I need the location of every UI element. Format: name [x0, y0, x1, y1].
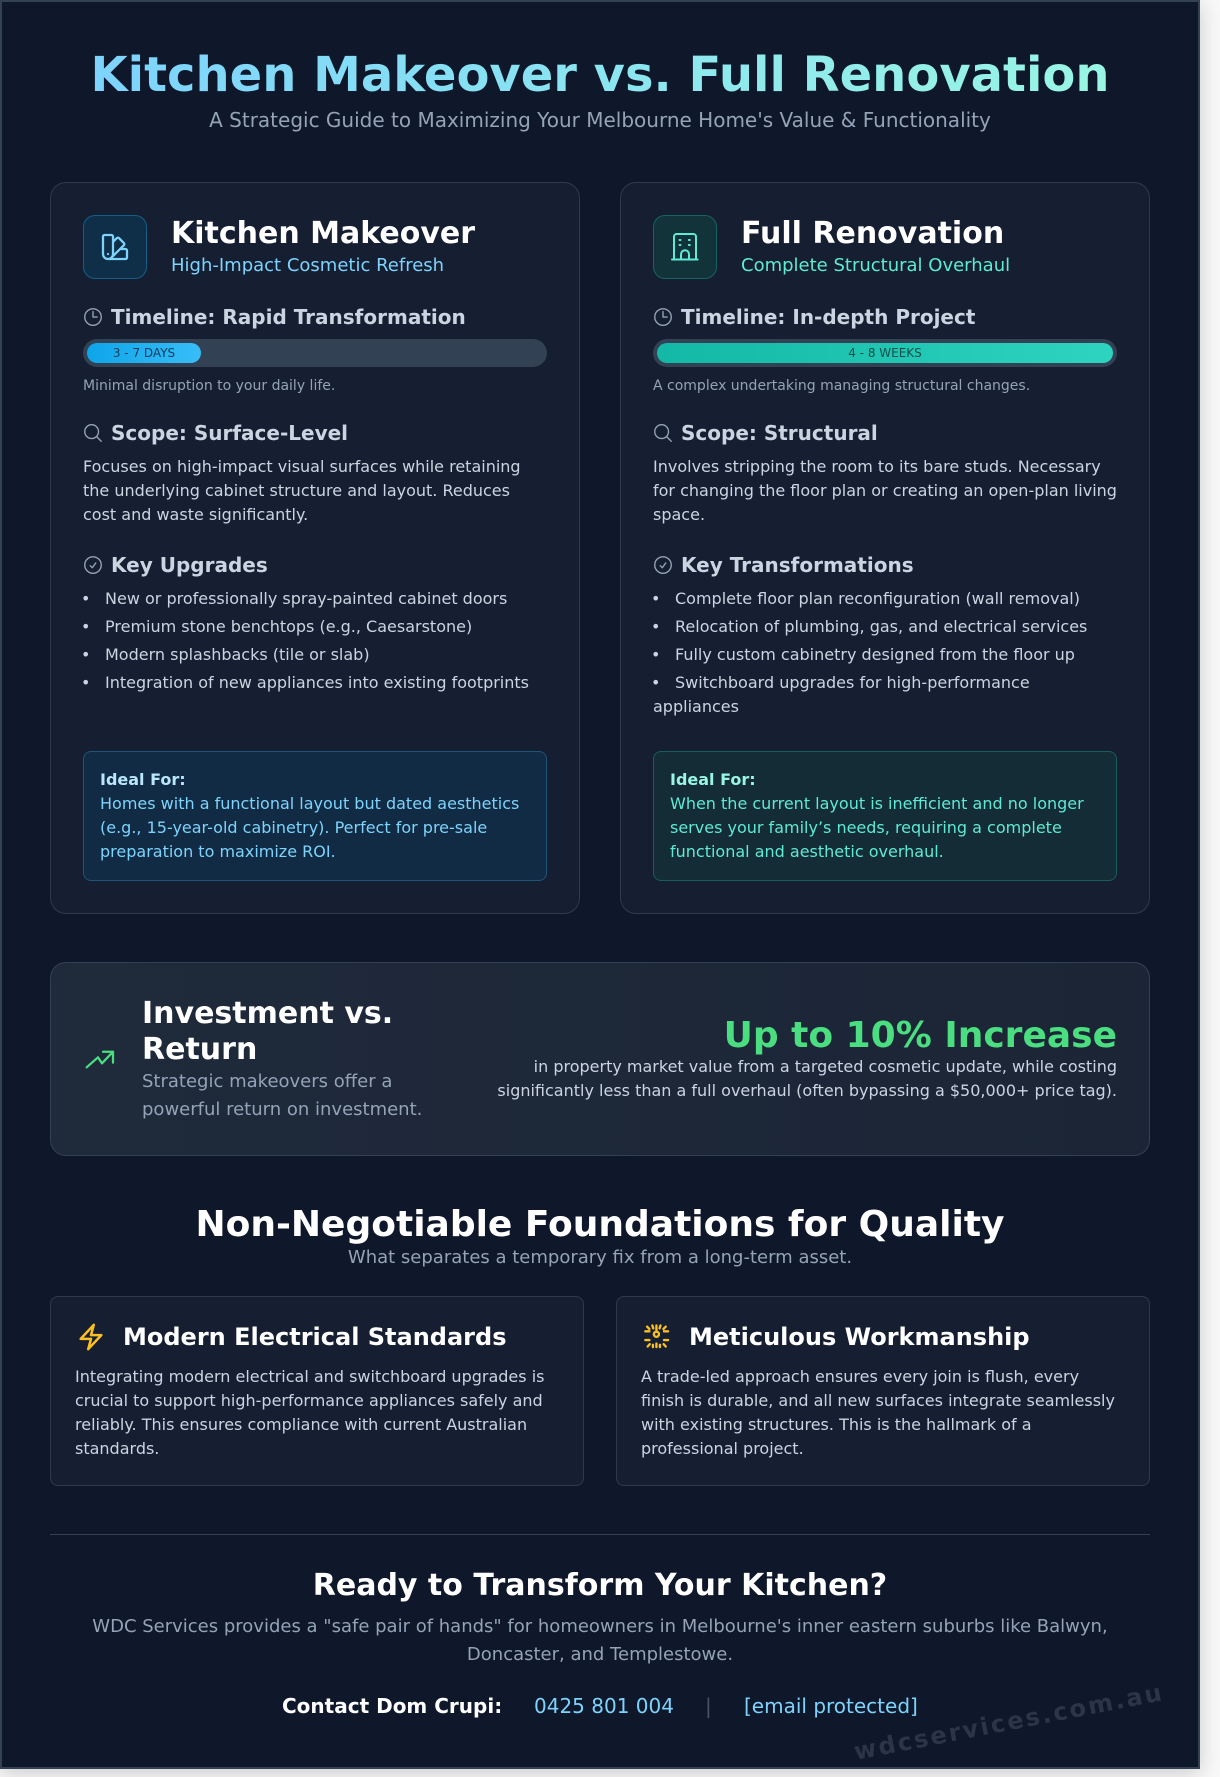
panel: full renovation	[620, 182, 1150, 914]
icon: search	[84, 424, 102, 442]
callout label: Ideal For:	[670, 770, 756, 789]
cta heading: Ready to Transform Your Kitchen?	[313, 1568, 887, 1603]
stat description	[497, 1057, 1117, 1100]
panel: meticulous workmanship	[616, 1296, 1150, 1486]
card text: crucial to support high-performance appliances safely and	[75, 1391, 543, 1410]
card text: professional project.	[641, 1439, 804, 1458]
card text: standards.	[75, 1439, 159, 1458]
scope text	[83, 457, 521, 524]
panel: investment vs return	[50, 962, 1150, 1156]
scope text: space.	[653, 505, 705, 524]
bar fill: 4 - 8 weeks	[657, 343, 1113, 363]
scope text	[653, 457, 1117, 524]
transformations list: •	[651, 645, 660, 664]
callout text: (e.g., 15-year-old cabinetry). Perfect for pre-sale	[100, 818, 487, 837]
icon: building	[653, 215, 717, 279]
bar fill: 3 - 7 days	[87, 343, 201, 363]
title: Kitchen Makeover vs. Full Renovation	[90, 47, 1110, 103]
card text	[641, 1367, 1115, 1458]
card text: finish is durable, and all new surfaces integrate seamlessly	[641, 1391, 1115, 1410]
icon: workmanship spark	[644, 1324, 670, 1348]
callout text: When the current layout is inefficient and no longer	[670, 794, 1084, 813]
callout text: Homes with a functional layout but dated aesthetics	[100, 794, 519, 813]
timeline heading: Timeline: Rapid Transformation	[111, 305, 466, 329]
cta text	[92, 1616, 1108, 1665]
panel: kitchen makeover	[50, 182, 580, 914]
timeline caption: A complex undertaking managing structural changes.	[653, 378, 1030, 394]
contact label: Contact Dom Crupi:	[282, 1694, 502, 1718]
stat description: significantly less than a full overhaul (often bypassing a $50,000+ price tag).	[497, 1081, 1117, 1100]
timeline caption: Minimal disruption to your daily life.	[83, 378, 335, 394]
callout text	[670, 794, 1084, 861]
timeline bar	[653, 339, 1117, 367]
subtitle: A Strategic Guide to Maximizing Your Melbourne Home's Value & Functionality	[209, 108, 991, 132]
card heading: Meticulous Workmanship	[689, 1323, 1030, 1351]
scope text: cost and waste significantly.	[83, 505, 308, 524]
upgrades list: Modern splashbacks (tile or slab)	[105, 645, 370, 664]
icon: trending up	[86, 1050, 114, 1068]
bar fill: 3 - 7 days: 3 - 7 DAYS	[113, 346, 175, 360]
scope text: the underlying cabinet structure and layout. Reduces	[83, 481, 510, 500]
section subheading: What separates a temporary fix from a long-term asset.	[348, 1247, 852, 1268]
card heading: Modern Electrical Standards	[123, 1323, 506, 1351]
callout text: functional and aesthetic overhaul.	[670, 842, 944, 861]
upgrades list: •	[81, 673, 90, 692]
scope heading: Scope: Surface-Level	[111, 421, 348, 445]
transformations list: Switchboard upgrades for high-performance	[675, 673, 1030, 692]
icon: swatch book	[83, 215, 147, 279]
upgrades list	[81, 589, 529, 692]
transformations list: Fully custom cabinetry designed from the floor up	[675, 645, 1075, 664]
transformations list	[651, 589, 1087, 716]
investment subtext: Strategic makeovers offer a	[142, 1071, 392, 1092]
phone: 0425 801 004	[534, 1694, 674, 1718]
timeline heading: Timeline: In-depth Project	[681, 305, 975, 329]
card text: A trade-led approach ensures every join is flush, every	[641, 1367, 1079, 1386]
transformations list: •	[651, 673, 660, 692]
transformations list: •	[651, 589, 660, 608]
transformations heading: Key Transformations	[681, 553, 914, 577]
card text: with existing structures. This is the hallmark of a	[641, 1415, 1032, 1434]
transformations list: Complete floor plan reconfiguration (wall removal)	[675, 589, 1080, 608]
icon: clock	[654, 308, 672, 326]
upgrades list: New or professionally spray-painted cabinet doors	[105, 589, 507, 608]
icon: check circle	[84, 556, 102, 574]
card text	[75, 1367, 544, 1458]
card text: Integrating modern electrical and switchboard upgrades is	[75, 1367, 544, 1386]
scope text: for changing the floor plan or creating an open-plan living	[653, 481, 1117, 500]
panel: full renovation: appliances	[653, 697, 739, 716]
icon: check circle	[654, 556, 672, 574]
callout text: preparation to maximize ROI.	[100, 842, 336, 861]
separator: |	[705, 1694, 712, 1718]
panel: electrical standards	[50, 1296, 584, 1486]
cta text: Doncaster, and Templestowe.	[467, 1644, 733, 1665]
icon: lightning bolt	[79, 1324, 103, 1350]
stat: up to 10% increase: Up to 10% Increase	[724, 1015, 1117, 1056]
bar fill: 4 - 8 weeks: 4 - 8 WEEKS	[848, 346, 922, 360]
investment subtext	[142, 1071, 422, 1120]
upgrades list: •	[81, 617, 90, 636]
section heading: foundations: Non-Negotiable Foundations for Quality	[196, 1204, 1004, 1245]
card text: reliably. This ensures compliance with current Australian	[75, 1415, 527, 1434]
email: [email protected]	[744, 1694, 918, 1718]
investment subtext: powerful return on investment.	[142, 1099, 422, 1120]
stat description: in property market value from a targeted cosmetic update, while costing	[534, 1057, 1117, 1076]
upgrades list: •	[81, 645, 90, 664]
investment heading	[142, 996, 393, 1067]
scope text: Focuses on high-impact visual surfaces while retaining	[83, 457, 521, 476]
upgrades heading: Key Upgrades	[111, 553, 268, 577]
card subtitle: Complete Structural Overhaul	[741, 255, 1010, 276]
contact row	[282, 1694, 918, 1718]
callout: ideal for	[83, 751, 547, 881]
upgrades list: Integration of new appliances into existing footprints	[105, 673, 529, 692]
timeline bar	[83, 339, 547, 367]
transformations list: Relocation of plumbing, gas, and electrical services	[675, 617, 1087, 636]
card subtitle: High-Impact Cosmetic Refresh	[171, 255, 444, 276]
investment heading: Investment vs.	[142, 996, 393, 1031]
card title: Full Renovation	[741, 216, 1004, 251]
investment heading: Return	[142, 1032, 257, 1067]
icon: search	[654, 424, 672, 442]
scope text: Involves stripping the room to its bare studs. Necessary	[653, 457, 1101, 476]
scope heading: Scope: Structural	[681, 421, 878, 445]
callout label: Ideal For:	[100, 770, 186, 789]
callout text	[100, 794, 519, 861]
cta text: WDC Services provides a "safe pair of hands" for homeowners in Melbourne's inner eastern suburbs like Balwyn,	[92, 1616, 1108, 1637]
watermark: wdcservices.com.au	[852, 1678, 1166, 1766]
upgrades list: Premium stone benchtops (e.g., Caesarstone)	[105, 617, 472, 636]
upgrades list: •	[81, 589, 90, 608]
icon: clock	[84, 308, 102, 326]
callout text: serves your family’s needs, requiring a complete	[670, 818, 1062, 837]
transformations list: •	[651, 617, 660, 636]
card title: Kitchen Makeover	[171, 216, 475, 251]
callout: ideal for	[653, 751, 1117, 881]
